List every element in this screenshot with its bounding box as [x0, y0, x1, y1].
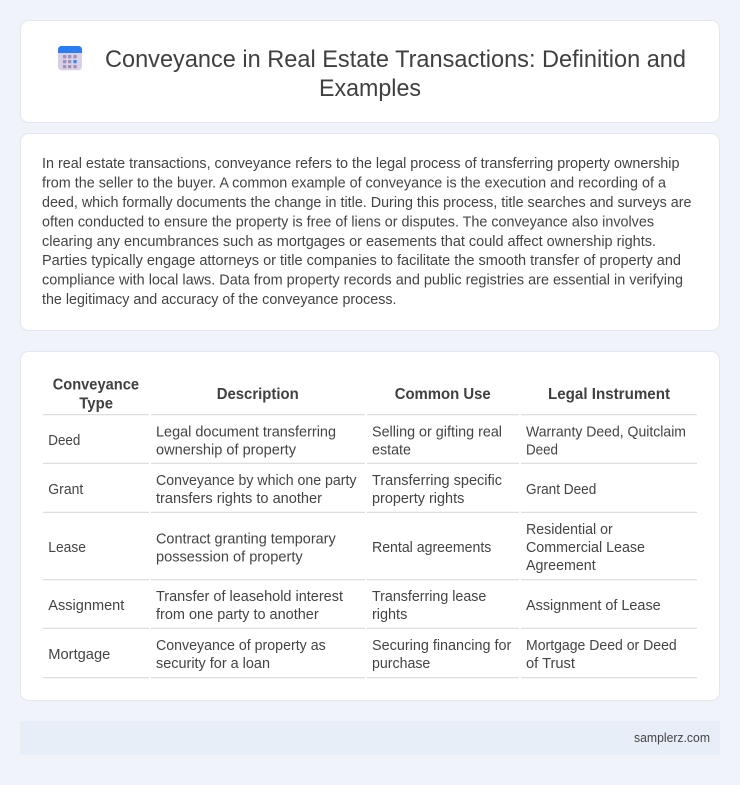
- table row: Assignment: rights: [372, 607, 407, 623]
- table header row: [53, 376, 671, 412]
- table row: Assignment: Transfer of leasehold interest: [156, 589, 343, 605]
- table row: Lease: Commercial Lease: [526, 540, 645, 556]
- table row: Grant: transfers rights to another: [156, 491, 322, 507]
- panel: title header: [20, 20, 720, 122]
- table row: Assignment: Assignment of Lease: [526, 598, 661, 614]
- table row: Mortgage: Mortgage: [48, 647, 110, 663]
- panel: conveyance types table: [20, 352, 720, 700]
- table row: Deed: Legal document transferring: [156, 424, 336, 440]
- text block: definition of conveyance: the legitimacy and accuracy of the conveyance process.: [42, 292, 396, 308]
- icon: calendar: [58, 46, 82, 70]
- text block: definition of conveyance: often conducted to ensure the property is free of liens or disputes. The conveyance also involves: [42, 214, 654, 230]
- table row: Lease: possession of property: [156, 549, 304, 565]
- table row: Deed: [48, 424, 686, 458]
- table row: Lease: [48, 522, 645, 574]
- table row: Lease: Lease: [48, 540, 86, 556]
- text block: definition of conveyance: clearing any encumbrances such as mortgages or easements that could affect ownership rights.: [42, 234, 656, 250]
- panel: intro paragraph: [20, 134, 720, 330]
- text block: definition of conveyance: compliance with local laws. Data from property records and public registries are essential in verifying: [42, 273, 683, 289]
- text block: definition of conveyance: [42, 156, 692, 308]
- footer bar: [20, 721, 720, 755]
- table row: Lease: Contract granting temporary: [156, 531, 337, 547]
- table row: Deed: Selling or gifting real: [372, 424, 502, 440]
- footer source text: samplerz.com: [634, 730, 710, 745]
- table row: Mortgage: security for a loan: [156, 656, 270, 672]
- table row: Mortgage: Securing financing for: [372, 638, 511, 654]
- title: [105, 46, 686, 102]
- table row: Mortgage: [48, 638, 677, 672]
- title: Conveyance in Real Estate Transactions: Definition and: [105, 46, 686, 73]
- text block: definition of conveyance: In real estate transactions, conveyance refers to the legal process of transferring property ownership: [42, 156, 680, 172]
- table row: Assignment: from one party to another: [156, 607, 319, 623]
- table row: Deed: Warranty Deed, Quitclaim: [526, 424, 686, 440]
- table row: Assignment: Transferring lease: [372, 589, 486, 605]
- table row: Deed: Deed: [526, 442, 558, 458]
- table row: Grant: Transferring specific: [372, 473, 502, 489]
- table header row: Legal Instrument: [548, 386, 671, 403]
- table row: Grant: [48, 473, 596, 507]
- table row: Grant: Conveyance by which one party: [156, 473, 357, 489]
- text block: definition of conveyance: Parties typically engage attorneys or title companies to facilitate the smooth transfer of property and: [42, 253, 681, 269]
- text block: definition of conveyance: from the seller to the buyer. A common example of conveyance is the execution and recording of a: [42, 175, 666, 191]
- table row: Mortgage: of Trust: [526, 656, 575, 672]
- text block: definition of conveyance: deed, which formally documents the change in title. During this process, title searches and surveys are: [42, 195, 692, 211]
- table row: Mortgage: Mortgage Deed or Deed: [526, 638, 677, 654]
- table header row: Conveyance: [53, 376, 139, 394]
- table row: Assignment: [48, 589, 661, 623]
- table row: Deed: estate: [372, 442, 411, 458]
- table row: Grant: Grant: [48, 482, 83, 498]
- table row: Mortgage: purchase: [372, 656, 430, 672]
- table row: Grant: property rights: [372, 491, 464, 507]
- table row: Deed: Deed: [48, 433, 80, 449]
- table row: Lease: Residential or: [526, 522, 613, 538]
- table header row: Common Use: [395, 386, 491, 403]
- table row: Mortgage: Conveyance of property as: [156, 638, 326, 654]
- title: Examples: [319, 75, 421, 102]
- table row: Lease: Rental agreements: [372, 540, 491, 556]
- table row: Lease: Agreement: [526, 558, 596, 574]
- table row: Deed: ownership of property: [156, 442, 297, 458]
- table row: Grant: Grant Deed: [526, 482, 596, 498]
- table header row: Type: [79, 396, 113, 412]
- table row: Assignment: Assignment: [48, 598, 124, 614]
- table header row: Description: [217, 386, 299, 403]
